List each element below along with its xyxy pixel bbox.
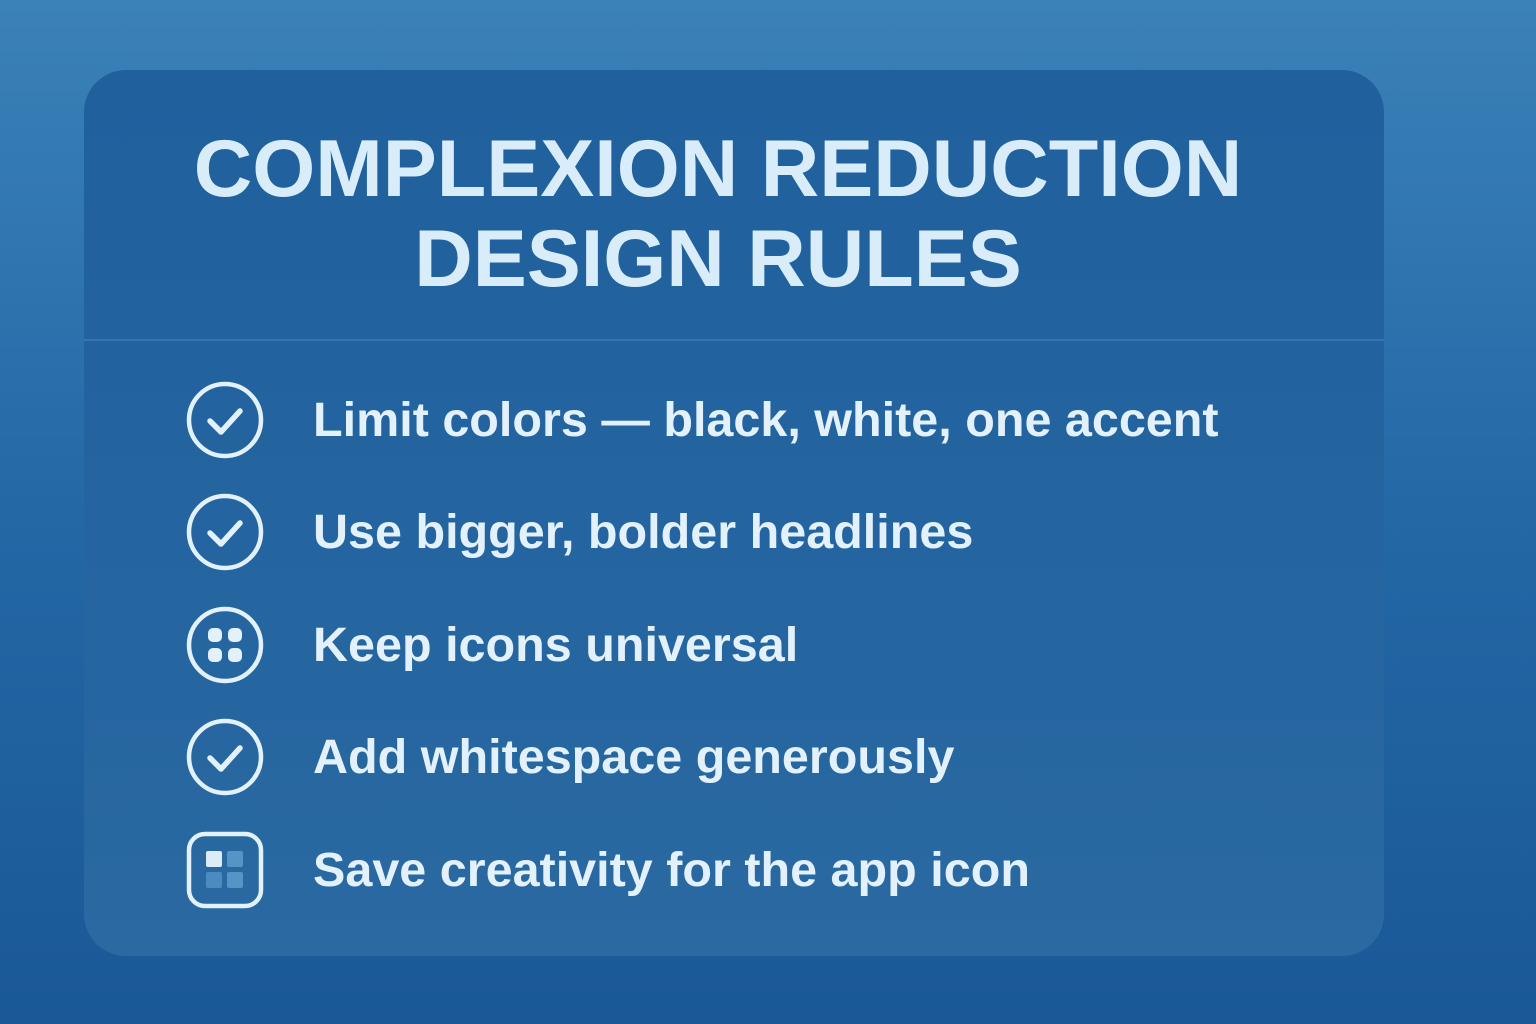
title: DESIGN RULES [414, 214, 1022, 304]
item: whitespace: Add whitespace generously [313, 730, 954, 784]
item: icons: Keep icons universal [313, 618, 798, 672]
panel [84, 70, 1384, 956]
item: app icon [186, 832, 1030, 908]
icon: dots [186, 606, 264, 684]
item: limit colors: Limit colors — black, white, one accent [313, 393, 1219, 447]
item: limit colors [186, 382, 1219, 458]
title [194, 124, 1242, 304]
item: headlines [186, 494, 973, 570]
icon: app grid [186, 832, 264, 908]
icon: check [186, 382, 264, 458]
title: COMPLEXION REDUCTION [194, 124, 1242, 214]
icon: check [186, 718, 264, 796]
item: app icon: Save creativity for the app icon [313, 843, 1030, 897]
item: whitespace [186, 718, 954, 796]
item: headlines: Use bigger, bolder headlines [313, 505, 973, 559]
item: icons [186, 606, 798, 684]
icon: check [186, 494, 264, 570]
